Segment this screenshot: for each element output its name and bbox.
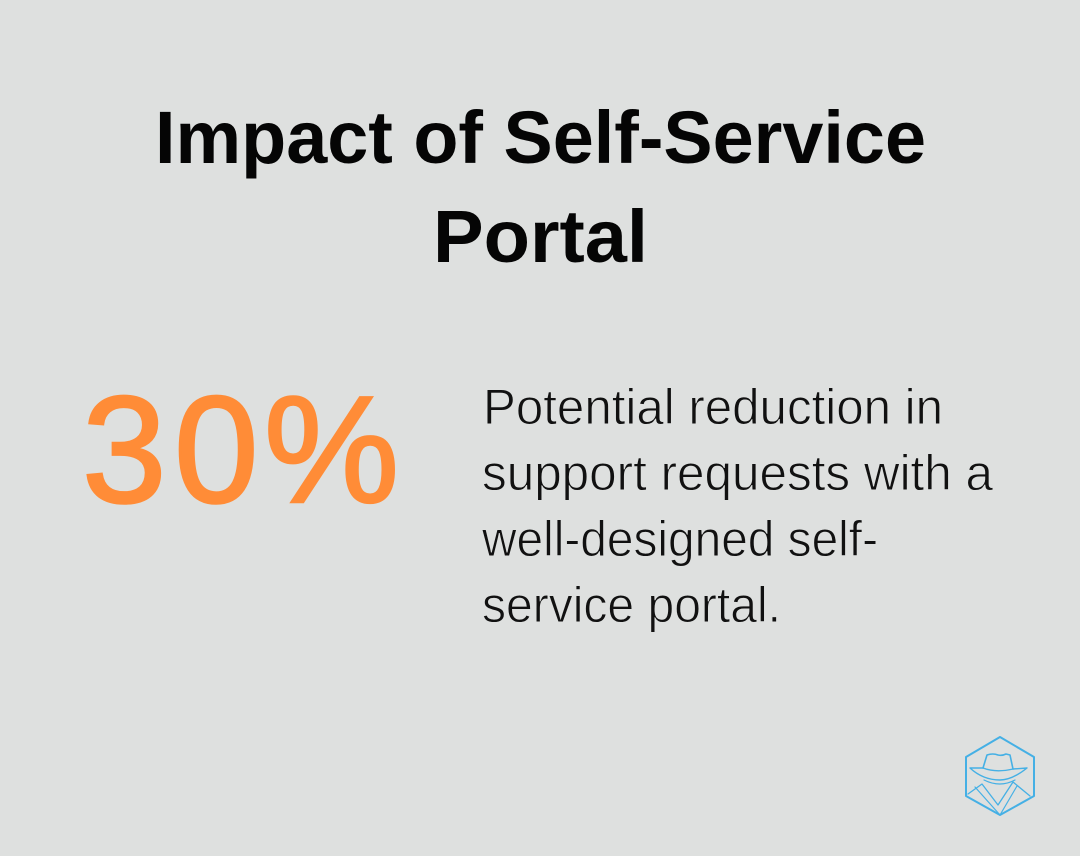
icon: hexagon logo with hatted figure — [966, 737, 1034, 815]
title — [155, 96, 926, 278]
statistic: 30%: 30% — [82, 365, 399, 535]
description text: support requests with a — [482, 445, 993, 501]
title: Portal — [433, 195, 648, 278]
description text: service portal. — [482, 577, 781, 633]
title: Impact of Self-Service — [155, 96, 926, 179]
description text — [481, 379, 993, 633]
description text: well-designed self- — [481, 511, 878, 567]
description text: Potential reduction in — [483, 379, 943, 435]
